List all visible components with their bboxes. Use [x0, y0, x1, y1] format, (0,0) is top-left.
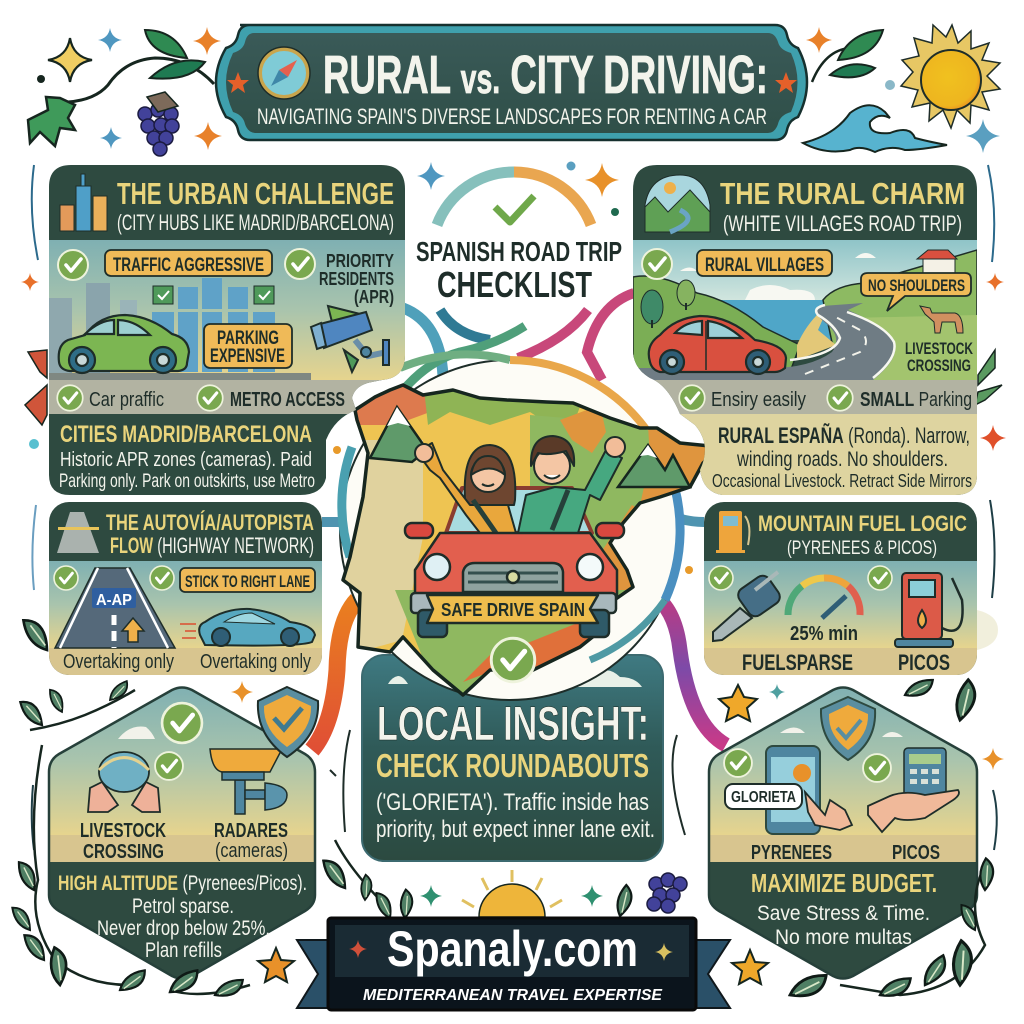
label: parking expensive	[204, 324, 292, 368]
decoration: top-left vine and grapes	[28, 27, 222, 156]
central red car	[405, 523, 624, 637]
label: traffic aggressive: TRAFFIC AGGRESSIVE	[113, 255, 264, 276]
text: metro access: METRO ACCESS	[230, 389, 345, 411]
icon: key	[713, 572, 783, 641]
label: no shoulders: NO SHOULDERS	[868, 276, 965, 295]
text: high altitude	[58, 872, 307, 962]
icon: highway	[57, 512, 99, 553]
checks	[642, 249, 853, 411]
icon: calculator	[904, 748, 946, 803]
icon: title stars	[227, 72, 797, 93]
checks	[709, 566, 892, 590]
logo text: Spanaly.com	[387, 921, 638, 977]
icon: fuel pump	[716, 511, 749, 553]
icon: checklist gauge arc	[437, 172, 591, 225]
checks	[57, 249, 315, 411]
logo ribbon tails	[297, 940, 730, 1008]
icon: trees	[641, 280, 695, 328]
panel: maximize budget hexagon	[709, 685, 977, 982]
label: glorieta	[725, 784, 802, 809]
heading: THE RURAL CHARM	[720, 176, 965, 211]
logo banner	[328, 918, 696, 1010]
label: priority residents: (APR)	[354, 287, 394, 307]
panel: rural charm	[633, 165, 977, 495]
icon: security camera	[311, 306, 389, 372]
panel: urban challenge	[49, 165, 405, 495]
label: livestock crossing	[905, 339, 974, 375]
decoration: sun, wave and leaves top right	[803, 25, 1000, 153]
ring behind map	[340, 354, 680, 700]
label: livestock crossing	[80, 820, 166, 863]
text: high altitude: HIGH ALTITUDE (Pyrenees/Picos).	[58, 872, 307, 895]
subheading: CHECK ROUNDABOUTS	[376, 747, 649, 784]
checks	[724, 749, 891, 782]
heading: maximize budget: MAXIMIZE BUDGET.	[751, 868, 937, 898]
subheading: (PYRENEES & PICOS)	[787, 538, 937, 559]
label: parking expensive: EXPENSIVE	[210, 346, 285, 367]
icon: pointing hand	[805, 792, 852, 830]
icon: petrol pump	[895, 573, 963, 647]
text: rural body: RURAL ESPAÑA (Ronda). Narrow,	[718, 423, 970, 448]
label: glorieta: GLORIETA	[731, 789, 796, 806]
banner: safe drive spain: SAFE DRIVE SPAIN	[441, 600, 585, 620]
text: rural body	[712, 423, 972, 491]
label: radares cameras: RADARES	[214, 820, 288, 842]
red car	[649, 316, 786, 374]
body text	[376, 789, 655, 843]
connectors	[312, 293, 726, 750]
text: cities: CITIES MADRID/BARCELONA	[60, 421, 312, 448]
panel: autovia highway	[49, 502, 322, 675]
label: rural villages	[697, 250, 832, 276]
text: small parking: SMALL Parking	[860, 389, 972, 411]
text: 25% min: 25% min	[790, 623, 858, 645]
label: parking expensive: PARKING	[217, 328, 279, 349]
banner: safe drive spain	[427, 595, 598, 623]
map of Spain	[341, 383, 705, 697]
label: priority residents	[319, 251, 394, 307]
label: livestock crossing: LIVESTOCK	[905, 339, 974, 358]
text: high altitude: Never drop below 25%.	[97, 917, 270, 940]
icon: house	[917, 250, 957, 274]
heading: checklist: SPANISH ROAD TRIP	[416, 236, 622, 267]
subheading: FLOW (HIGHWAY NETWORK)	[110, 533, 314, 558]
checklist arc and title: CHECKLIST	[437, 264, 592, 305]
heading: LOCAL INSIGHT:	[377, 698, 649, 751]
icon: cow	[920, 306, 963, 333]
tagline: MEDITERRANEAN TRAVEL EXPERTISE	[363, 987, 663, 1004]
icon: insight check badge	[491, 638, 535, 682]
label: no shoulders	[861, 273, 971, 311]
man	[518, 436, 625, 533]
scene: sea and hills	[633, 250, 977, 380]
icon: mountain road	[645, 175, 710, 232]
label: stick to right lane	[180, 568, 315, 592]
label: radares cameras	[214, 820, 288, 862]
heading: THE URBAN CHALLENGE	[117, 176, 394, 211]
title text: RURAL vs. CITY DRIVING:	[323, 45, 768, 105]
panel: mountain fuel logic	[704, 502, 977, 675]
scene: city buildings	[49, 278, 275, 373]
road graphic	[55, 568, 175, 648]
subtitle: NAVIGATING SPAIN'S DIVERSE LANDSCAPES FOR RENTING A CAR	[257, 104, 767, 129]
woman	[415, 443, 516, 533]
heading: MOUNTAIN FUEL LOGIC	[758, 511, 967, 536]
text: overtaking right: Overtaking only	[200, 651, 311, 673]
panel: local insight	[362, 655, 663, 861]
icon: mountain east	[618, 445, 690, 487]
text: high altitude: Plan refills	[145, 939, 222, 962]
body text: ('GLORIETA'). Traffic inside has	[376, 789, 649, 816]
text: car traffic: Car praffic	[89, 389, 164, 411]
icon: fuel gauge	[788, 578, 860, 618]
icon: shield	[258, 687, 318, 757]
text: rural body: winding roads. No shoulders.	[736, 448, 948, 471]
text: picos: PICOS	[898, 650, 950, 675]
icon: open hand	[868, 790, 959, 832]
panel: high altitude hexagon	[49, 685, 318, 982]
label: livestock crossing: CROSSING	[83, 841, 164, 863]
icon: phone	[766, 746, 820, 834]
road graphic: A-AP	[96, 592, 132, 609]
subheading: (CITY HUBS LIKE MADRID/BARCELONA)	[117, 210, 394, 235]
icon: rising sun	[462, 870, 562, 917]
green car	[59, 315, 189, 373]
heading: THE AUTOVÍA/AUTOPISTA	[106, 510, 314, 535]
text: fuel sparse: FUELSPARSE	[742, 650, 853, 675]
body text: Save Stress & Time.	[757, 902, 930, 925]
text: urban body: Historic APR zones (cameras). Paid	[60, 449, 312, 471]
icon: compass	[258, 47, 310, 99]
checklist arc and title	[416, 172, 622, 340]
label: radares cameras: (cameras)	[215, 840, 288, 862]
label: picos: PICOS	[892, 842, 940, 864]
text: entry easily: Ensiry easily	[711, 389, 806, 411]
icon: orange camera	[210, 749, 287, 814]
label: livestock crossing: CROSSING	[907, 356, 971, 375]
checks	[54, 566, 174, 590]
label: livestock crossing: LIVESTOCK	[80, 820, 166, 842]
icon: shield	[821, 697, 875, 760]
text: urban body	[59, 449, 315, 492]
teal car	[199, 609, 315, 646]
text: overtaking left: Overtaking only	[63, 651, 174, 673]
label: priority residents: RESIDENTS	[319, 269, 394, 289]
icon: city skyline	[60, 174, 107, 231]
label: priority residents: PRIORITY	[326, 251, 394, 271]
title banner	[216, 25, 807, 140]
icon: steering wheel hands	[88, 752, 160, 812]
body text: No more multas	[775, 926, 912, 949]
label: stick to right lane: STICK TO RIGHT LANE	[185, 572, 310, 591]
label: traffic aggressive	[105, 250, 272, 276]
label: rural villages: RURAL VILLAGES	[705, 255, 824, 276]
people in car	[415, 436, 625, 533]
decoration: side swashes and stars	[21, 162, 1006, 850]
checks	[155, 703, 202, 780]
icon: mountain west	[370, 407, 427, 462]
decoration: bottom foliage and stars	[12, 615, 1004, 998]
body text: priority, but expect inner lane exit.	[376, 816, 655, 843]
text: high altitude: Petrol sparse.	[132, 895, 234, 918]
body text	[757, 902, 930, 949]
text: urban body: Parking only. Park on outskirts, use Metro	[59, 471, 315, 492]
label: pyrenees: PYRENEES	[751, 842, 832, 864]
